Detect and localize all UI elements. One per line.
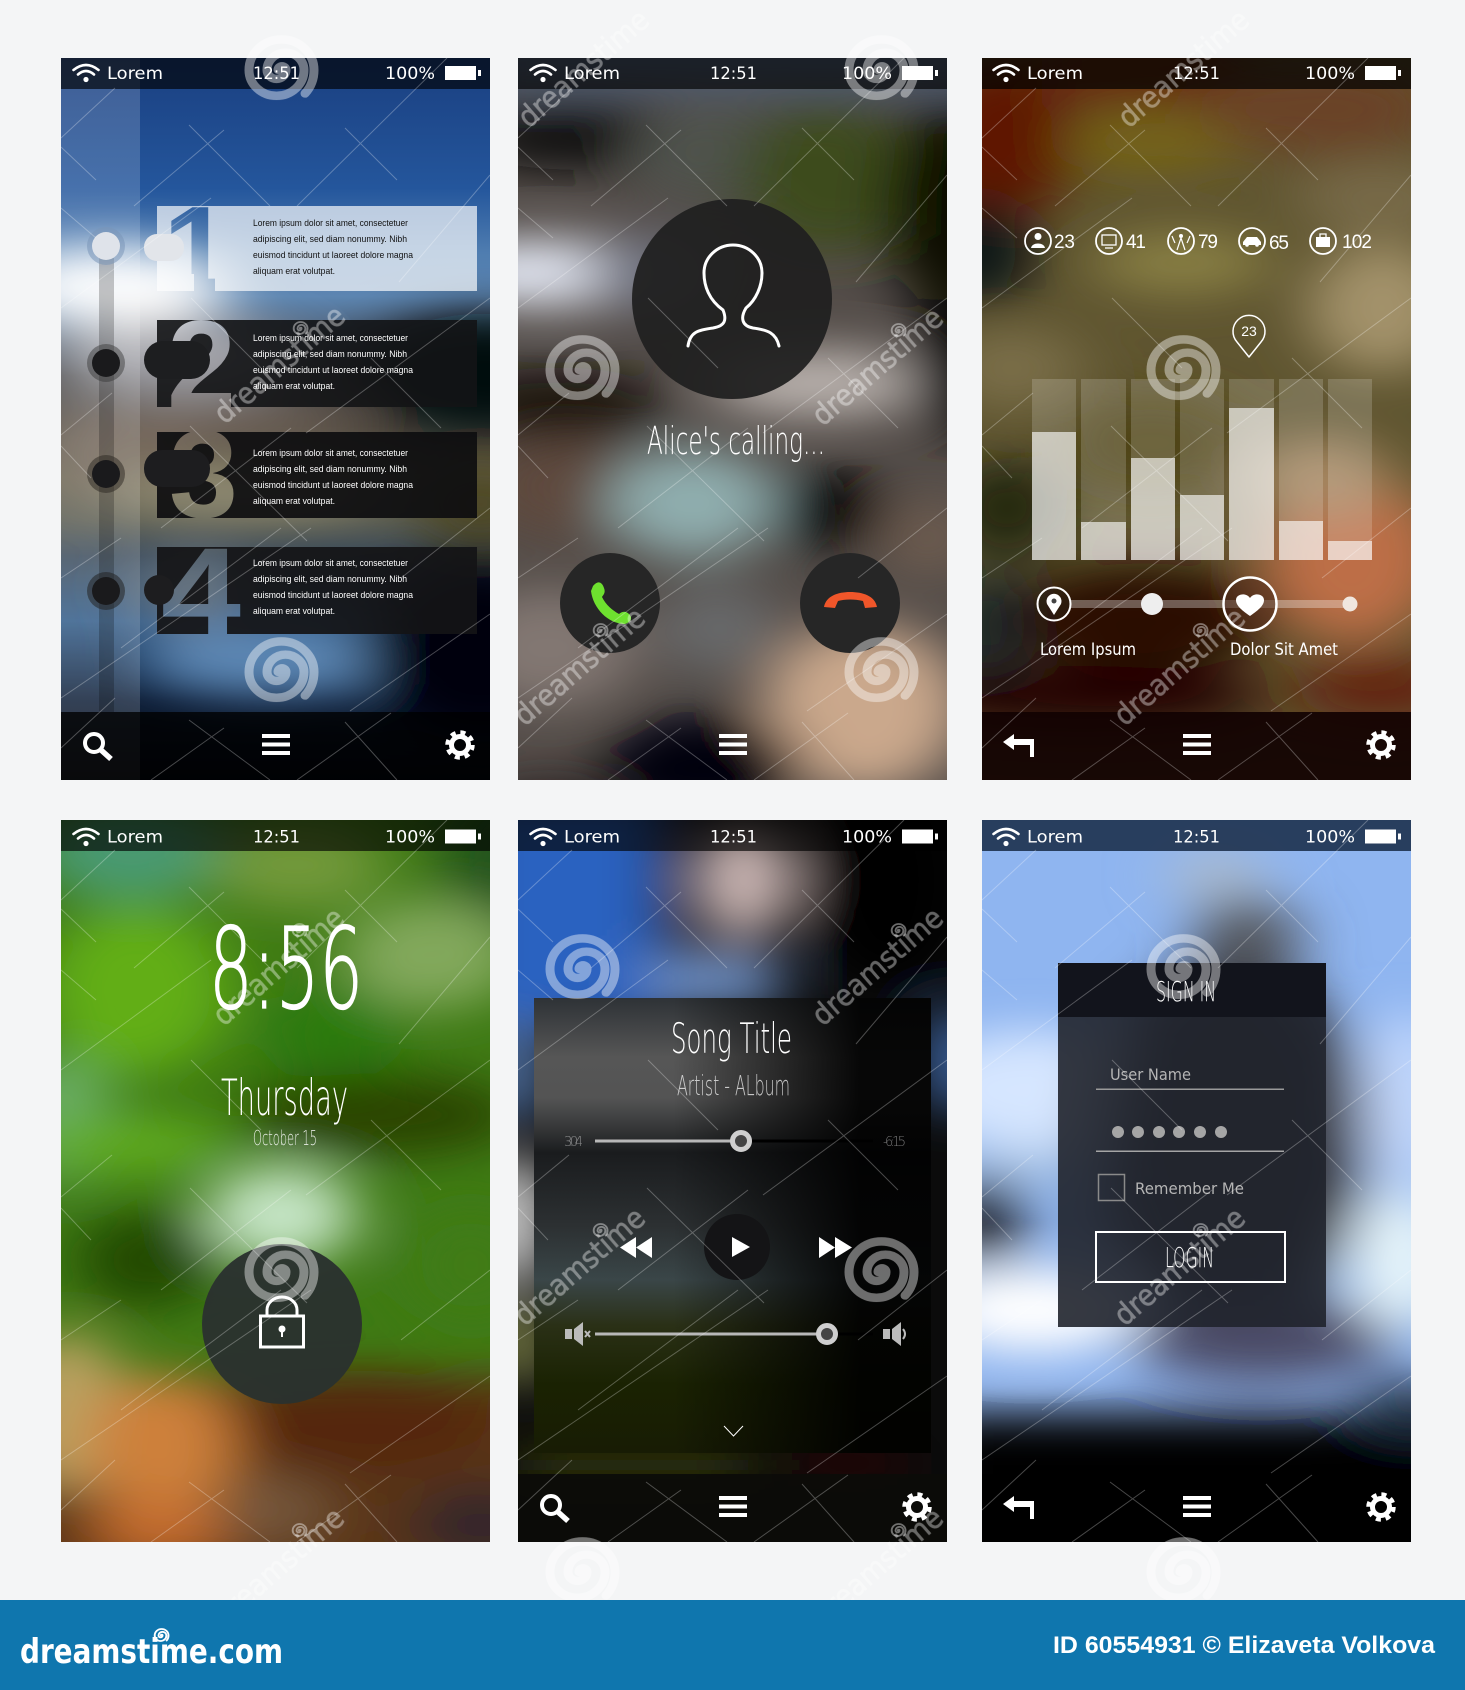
- date: October 15: [253, 1126, 317, 1150]
- step 1: aliquam erat volutpat.: [253, 266, 335, 277]
- watermark text: [206, 2, 1256, 1632]
- stat: 102: [1310, 228, 1372, 254]
- watermark text: dreamstime: [805, 300, 950, 432]
- range slider: [1038, 578, 1358, 630]
- watermark text: dreamstime: [207, 298, 352, 430]
- status bar: 100%: [385, 64, 435, 84]
- watermark small spirals: [293, 322, 1208, 1536]
- watermark text: dreamstime: [1107, 1200, 1252, 1332]
- blurred background: sky and black: [912, 820, 1465, 1542]
- step 3: aliquam erat volutpat.: [253, 496, 335, 507]
- status bar: 12:51: [710, 828, 757, 848]
- status bar: 100%: [842, 828, 892, 848]
- icon: search: [85, 734, 111, 759]
- stat: 23: [1025, 228, 1075, 254]
- status bar: [518, 58, 947, 89]
- stat: 23: 23: [1054, 232, 1075, 253]
- step 3: Lorem ipsum dolor sit amet, consectetuer: [253, 448, 408, 459]
- watermark text: dreamstime: [1107, 600, 1252, 732]
- step 1: euismod tincidunt ut laoreet dolore magna: [253, 250, 414, 261]
- icon: rewind: [620, 1237, 652, 1258]
- status bar: [982, 820, 1411, 851]
- step 4: aliquam erat volutpat.: [253, 606, 335, 617]
- bottom bar: [61, 712, 490, 780]
- accept button: [560, 553, 660, 653]
- watermark text: dreamstime: [507, 1200, 652, 1332]
- blurred background: blue and black: [458, 770, 986, 1542]
- steps list: [87, 206, 477, 634]
- step 2: Lorem ipsum dolor sit amet, consectetuer: [253, 333, 408, 344]
- step 4: euismod tincidunt ut laoreet dolore magna: [253, 590, 414, 601]
- remember me: Remember Me: [1135, 1179, 1244, 1198]
- icon: play button: [704, 1214, 770, 1280]
- step 3: [87, 432, 477, 518]
- blurred background: green and orange: [0, 785, 571, 1595]
- step 2: euismod tincidunt ut laoreet dolore magna: [253, 365, 414, 376]
- step 4: Lorem ipsum dolor sit amet, consectetuer: [253, 558, 408, 569]
- sign-in panel: [1058, 963, 1326, 1327]
- phone screen: music player: [458, 770, 986, 1542]
- remember me: [1098, 1174, 1244, 1200]
- watermark text: dreamstime: [206, 1500, 351, 1632]
- phone screen: statistics chart: [982, 58, 1411, 780]
- icon: back arrow: [1003, 1496, 1034, 1519]
- slider labels: [1041, 642, 1338, 658]
- status bar: [518, 820, 947, 851]
- status bar: Lorem: [1027, 64, 1083, 84]
- status bar: 12:51: [1173, 828, 1220, 848]
- step 4: [87, 547, 477, 634]
- icon: settings: [904, 1494, 930, 1520]
- step 1: Lorem ipsum dolor sit amet, consectetuer: [253, 218, 408, 229]
- phone screen: lock screen: [0, 785, 571, 1595]
- status bar: 100%: [385, 828, 435, 848]
- bottom bar: [518, 1474, 947, 1542]
- icon: settings: [448, 732, 472, 758]
- stat: 79: 79: [1198, 232, 1218, 253]
- status bar: 12:51: [253, 64, 300, 84]
- phone screen: sign in: [912, 820, 1465, 1542]
- stat: 79: [1168, 228, 1218, 254]
- watermark spirals: [249, 39, 1216, 1598]
- step 2: [87, 320, 477, 407]
- blurred background: grey and brown: [518, 58, 947, 780]
- pin callout: [1233, 315, 1265, 357]
- stat: 65: 65: [1269, 233, 1289, 254]
- status bar: [61, 820, 490, 851]
- phone screen: incoming call: [518, 58, 947, 780]
- step 1: adipiscing elit, sed diam nonummy. Nibh: [253, 234, 407, 245]
- artist album: Artist - ALbum: [677, 1069, 790, 1102]
- watermark text: dreamstime: [206, 900, 351, 1032]
- status bar: Lorem: [1027, 828, 1083, 848]
- icon: search: [542, 1496, 568, 1521]
- bottom bar: [982, 712, 1411, 780]
- icon: menu: [719, 1496, 747, 1517]
- player panel: [534, 998, 931, 1453]
- status bar: 100%: [1305, 828, 1355, 848]
- step 3: euismod tincidunt ut laoreet dolore magna: [253, 480, 414, 491]
- slider labels: Lorem Ipsum: [1040, 640, 1136, 659]
- blurred background: blue with white band: [61, 58, 490, 780]
- clock: 8:56: [209, 905, 363, 1035]
- blurred background: olive and rust: [982, 58, 1411, 780]
- sign-in heading: SIGN IN: [1156, 975, 1216, 1008]
- icon: menu: [1183, 734, 1211, 755]
- icon: menu: [1183, 1496, 1211, 1517]
- stat: 41: 41: [1126, 232, 1146, 253]
- icon: menu: [262, 734, 290, 755]
- caller avatar: [632, 199, 832, 399]
- slider labels: Dolor Sit Amet: [1230, 640, 1338, 659]
- status bar: 12:51: [1173, 64, 1220, 84]
- stat: 41: [1096, 228, 1146, 254]
- step 2: aliquam erat volutpat.: [253, 381, 335, 392]
- status bar: 12:51: [710, 64, 757, 84]
- status bar: Lorem: [107, 64, 163, 84]
- status bar: [61, 58, 490, 89]
- bar chart: [1032, 379, 1372, 560]
- phone screen: timeline list: [61, 58, 490, 780]
- password field: [1096, 1126, 1284, 1152]
- icon: back arrow: [1003, 734, 1034, 757]
- pin callout: 23: [1241, 323, 1257, 339]
- step 3: adipiscing elit, sed diam nonummy. Nibh: [253, 464, 407, 475]
- volume slider: [565, 1322, 905, 1346]
- chevron: [724, 1426, 743, 1436]
- status bar: [982, 58, 1411, 89]
- icon: menu: [719, 734, 747, 755]
- step 4: adipiscing elit, sed diam nonummy. Nibh: [253, 574, 407, 585]
- icon: fast forward: [819, 1237, 852, 1258]
- progress slider: -6:15: [883, 1135, 906, 1150]
- step 1: [87, 206, 477, 291]
- stats row: [1025, 228, 1372, 254]
- image credit: ID 60554931 © Elizaveta Volkova: [1053, 1632, 1436, 1659]
- decline button: [800, 553, 900, 653]
- watermark text: dreamstime: [805, 900, 950, 1032]
- status bar: Lorem: [564, 828, 620, 848]
- stat: 102: 102: [1342, 232, 1372, 253]
- username field: User Name: [1110, 1065, 1191, 1084]
- login button: [1096, 1232, 1285, 1282]
- status bar: 100%: [842, 64, 892, 84]
- progress slider: [564, 1132, 906, 1150]
- footer band: [0, 1600, 1465, 1690]
- icon: settings: [1368, 1494, 1394, 1520]
- icon: settings: [1368, 732, 1394, 758]
- step 2: adipiscing elit, sed diam nonummy. Nibh: [253, 349, 407, 360]
- login button: LOGIN: [1165, 1241, 1214, 1274]
- bottom bar: [982, 1474, 1411, 1542]
- progress slider: 3:04: [564, 1135, 583, 1150]
- song title: Song Title: [671, 1014, 792, 1063]
- caller label: Alice's calling...: [647, 419, 825, 463]
- status bar: Lorem: [564, 64, 620, 84]
- watermark text: dreamstime: [805, 1500, 950, 1632]
- status bar: 100%: [1305, 64, 1355, 84]
- stat: 65: [1239, 228, 1289, 254]
- playback controls: [620, 1214, 852, 1280]
- lock button: [202, 1244, 362, 1404]
- status bar: Lorem: [107, 828, 163, 848]
- footer logo: dreamstime.com: [20, 1632, 283, 1672]
- status bar: 12:51: [253, 828, 300, 848]
- day: Thursday: [221, 1069, 348, 1127]
- watermark text: dreamstime: [507, 600, 652, 732]
